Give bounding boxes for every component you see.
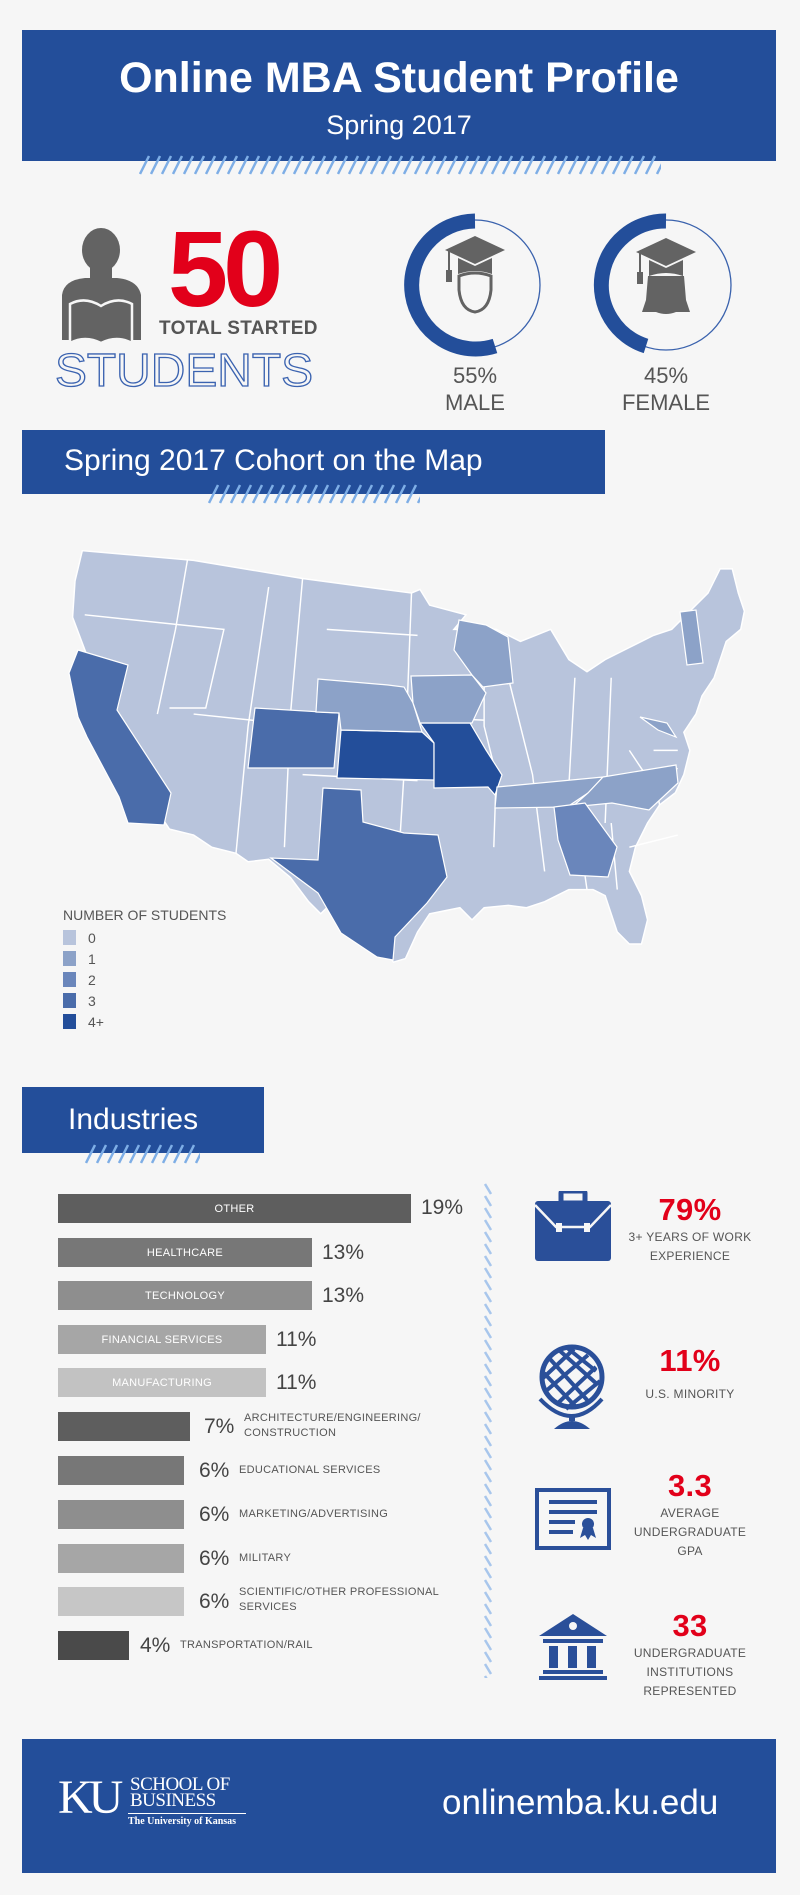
bar chart: industries: 13% [322,1284,364,1307]
label male: MALE [445,390,505,415]
bar chart: industries: 19% [421,1196,463,1219]
stat: institutions: REPRESENTED [643,1684,737,1698]
stat: minority: 11% [659,1343,721,1378]
label female: 45% [644,363,688,388]
stat: minority: U.S. MINORITY [645,1387,735,1401]
bar chart: industries: 7% [204,1415,234,1438]
KU logo: SCHOOL OF [130,1774,230,1795]
stat: work experience: 79% [659,1192,721,1227]
label female [622,363,710,415]
stat: institutions [634,1608,746,1698]
bar chart: industries: OTHER [214,1202,254,1214]
icon: building [539,1614,607,1680]
map heading [22,430,605,494]
map heading: Spring 2017 Cohort on the Map [64,444,483,477]
bar chart: industries: MILITARY [239,1552,291,1564]
legend: 0 [88,930,96,946]
KU logo: KU [58,1771,119,1824]
bar chart: industries: SERVICES [239,1601,297,1613]
KU logo: The University of Kansas [128,1816,236,1827]
female donut [594,214,732,415]
stat: institutions: 33 [672,1608,708,1643]
bar chart: industries: EDUCATIONAL SERVICES [239,1464,380,1476]
icon: female grad [636,238,696,314]
bar chart: industries: 6% [199,1590,229,1613]
number 50: 50 [168,208,278,329]
total started label: TOTAL STARTED [159,318,318,339]
subtitle: Spring 2017 [326,110,472,140]
bar chart: industries: SCIENTIFIC/OTHER PROFESSIONAL [239,1586,439,1598]
industries heading: Industries [68,1103,198,1136]
bar chart: industries: MARKETING/ADVERTISING [239,1508,388,1520]
legend: 1 [88,950,96,966]
stat: GPA: UNDERGRADUATE [634,1525,746,1539]
stat: work experience [629,1192,751,1263]
male donut [404,214,541,415]
icon: briefcase [535,1191,611,1261]
label male [445,363,505,415]
stat: work experience: 3+ YEARS OF WORK [629,1230,751,1244]
label female: FEMALE [622,390,710,415]
bar chart: industries: MANUFACTURING [112,1376,212,1388]
icon: person reading [62,228,141,342]
bar chart: industries: 11% [276,1371,316,1394]
legend [63,907,226,1030]
stat: GPA [634,1468,746,1558]
header banner [22,30,776,161]
bar chart: industries: ARCHITECTURE/ENGINEERING/ [244,1412,421,1424]
map [68,550,745,962]
bar chart: industries: FINANCIAL SERVICES [102,1334,222,1346]
icon: male grad [445,236,505,312]
legend: 3 [88,992,96,1008]
bar chart: industries: TECHNOLOGY [145,1290,225,1302]
industries heading [22,1087,264,1153]
stat: GPA: AVERAGE [660,1506,720,1520]
bar chart: industries: 11% [276,1328,316,1351]
stat: GPA: 3.3 [668,1468,712,1503]
bar chart: industries: HEALTHCARE [147,1246,223,1258]
bar chart: industries: 13% [322,1241,364,1264]
bar chart: industries: 6% [199,1459,229,1482]
bar chart: industries [58,1194,463,1660]
bar chart: industries: 4% [140,1634,170,1657]
title: Online MBA Student Profile [119,54,679,102]
legend: NUMBER OF STUDENTS [63,907,226,923]
bar chart: industries: TRANSPORTATION/RAIL [180,1639,313,1651]
label male: 55% [453,363,497,388]
footer [22,1739,776,1873]
legend: 4+ [88,1014,104,1030]
stat: institutions: INSTITUTIONS [647,1665,733,1679]
stat: work experience: EXPERIENCE [650,1249,730,1263]
bar chart: industries: CONSTRUCTION [244,1427,336,1439]
icon: certificate [535,1488,611,1550]
url: onlinemba.ku.edu [442,1783,718,1822]
total students block [55,208,318,396]
stat: GPA: GPA [677,1544,703,1558]
KU logo: BUSINESS [130,1790,216,1811]
stat: institutions: UNDERGRADUATE [634,1646,746,1660]
bar chart: industries: 6% [199,1547,229,1570]
legend: 2 [88,972,96,988]
icon: globe [538,1344,604,1429]
KU logo [58,1771,246,1827]
stat: minority [645,1343,735,1401]
bar chart: industries: 6% [199,1503,229,1526]
